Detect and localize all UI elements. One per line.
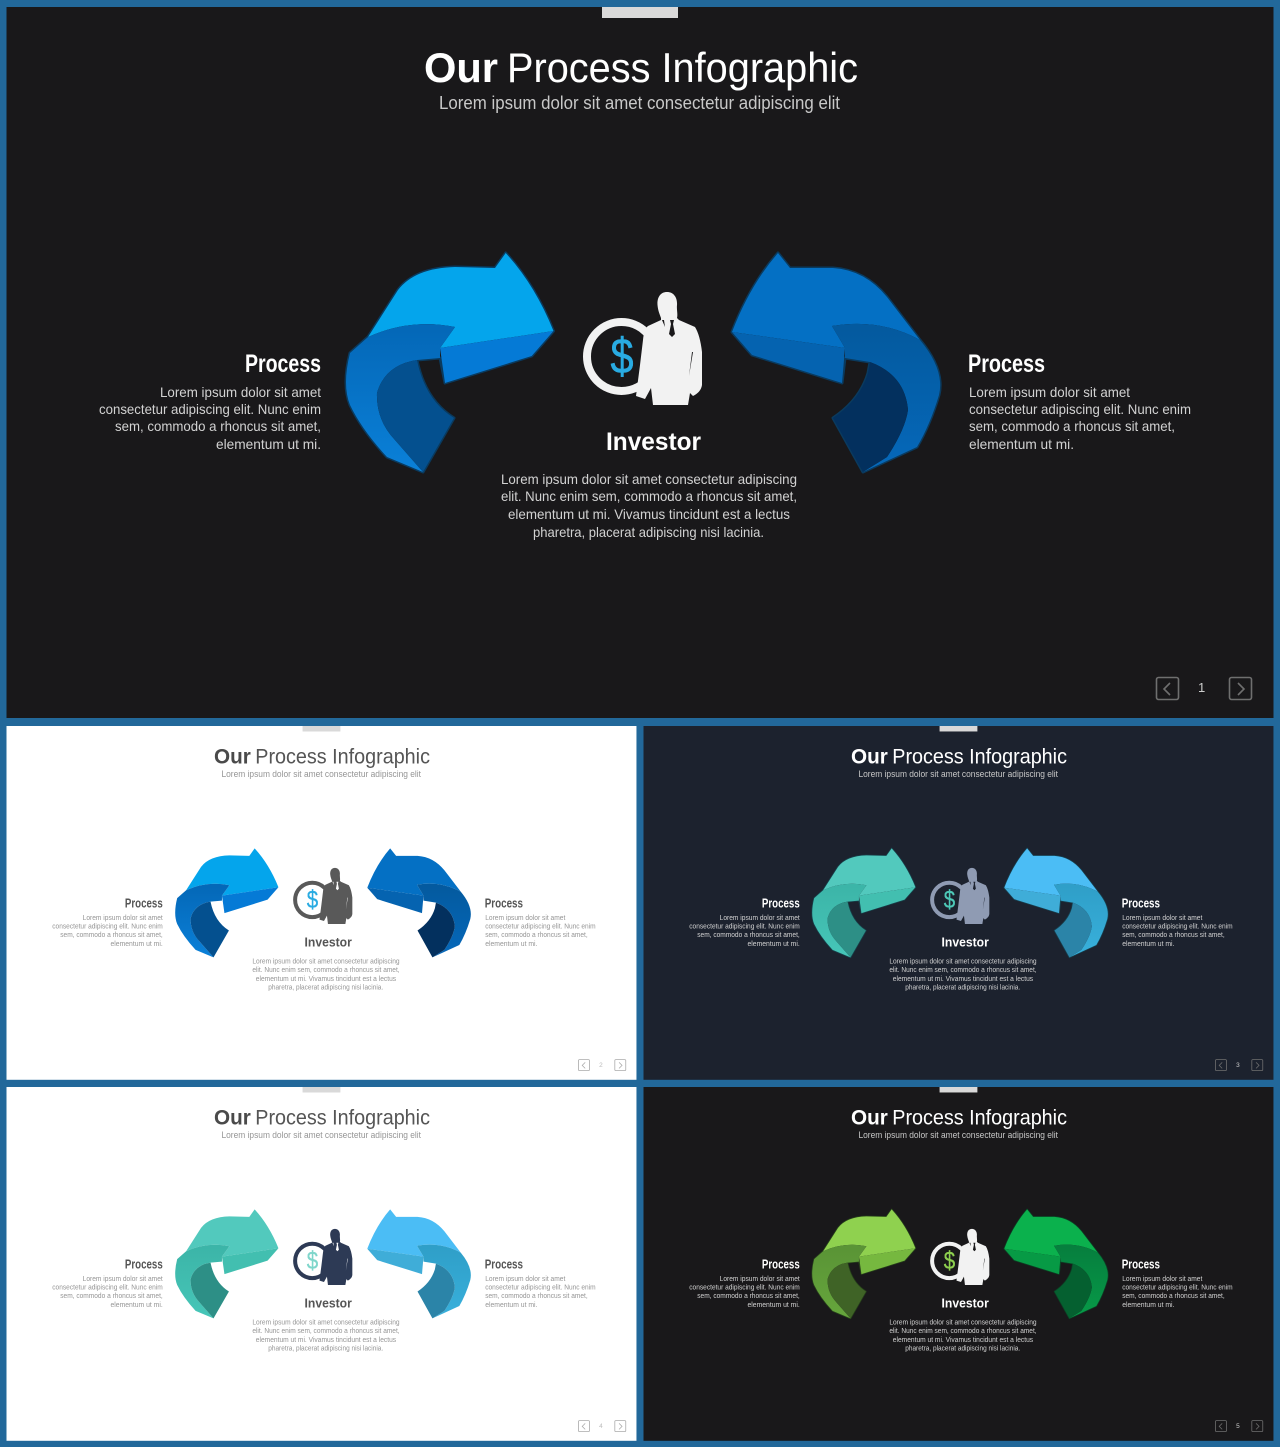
investor text: Lorem ipsum dolor sit amet consectetur adipiscing bbox=[252, 958, 400, 965]
right process heading: Process bbox=[485, 897, 523, 911]
left process text: Lorem ipsum dolor sit amet bbox=[720, 1276, 800, 1283]
title: Process Infographic bbox=[255, 745, 430, 768]
right process text: consectetur adipiscing elit. Nunc enim bbox=[1122, 924, 1233, 931]
right arrow bbox=[367, 1209, 471, 1318]
left process text: consectetur adipiscing elit. Nunc enim bbox=[99, 401, 321, 417]
right process text bbox=[1122, 915, 1233, 948]
left process text: elementum ut mi. bbox=[747, 1302, 800, 1309]
right process text: sem, commodo a rhoncus sit amet, bbox=[485, 932, 588, 939]
right process text: Lorem ipsum dolor sit amet bbox=[485, 1276, 565, 1283]
left process heading: Process bbox=[762, 1258, 800, 1272]
investor text: elit. Nunc enim sem, commodo a rhoncus sit amet, bbox=[889, 967, 1037, 974]
subtitle: Lorem ipsum dolor sit amet consectetur adipiscing elit bbox=[858, 1130, 1058, 1140]
investor text bbox=[889, 1319, 1037, 1353]
investor text: elementum ut mi. Vivamus tincidunt est a lectus bbox=[893, 976, 1034, 983]
left process text: consectetur adipiscing elit. Nunc enim bbox=[52, 924, 163, 931]
left process text: consectetur adipiscing elit. Nunc enim bbox=[689, 924, 800, 931]
right process text: Lorem ipsum dolor sit amet bbox=[1122, 915, 1202, 922]
left process heading: Process bbox=[762, 897, 800, 911]
left arrow bbox=[346, 253, 554, 472]
left arrow bbox=[175, 1209, 278, 1318]
right process text: sem, commodo a rhoncus sit amet, bbox=[1122, 932, 1225, 939]
left process heading: Process bbox=[125, 897, 163, 911]
title: Process Infographic bbox=[892, 1106, 1067, 1129]
navigation bbox=[578, 1421, 626, 1432]
navigation bbox=[1156, 678, 1252, 700]
icon: investor with dollar coin bbox=[295, 868, 352, 924]
left process text: sem, commodo a rhoncus sit amet, bbox=[60, 1293, 163, 1300]
investor text bbox=[252, 1319, 400, 1353]
investor text: Lorem ipsum dolor sit amet consectetur adipiscing bbox=[889, 1319, 1037, 1326]
investor text bbox=[889, 958, 1037, 992]
right process text: consectetur adipiscing elit. Nunc enim bbox=[485, 924, 596, 931]
left arrow bbox=[175, 848, 278, 957]
right process text bbox=[485, 1276, 596, 1309]
right process text: consectetur adipiscing elit. Nunc enim bbox=[1122, 1285, 1233, 1292]
right process text: Lorem ipsum dolor sit amet bbox=[485, 915, 565, 922]
left process text bbox=[52, 1276, 163, 1309]
title: Our bbox=[851, 1106, 888, 1129]
investor text: elit. Nunc enim sem, commodo a rhoncus sit amet, bbox=[252, 967, 400, 974]
right process text bbox=[969, 384, 1191, 452]
right process text: consectetur adipiscing elit. Nunc enim bbox=[485, 1285, 596, 1292]
icon: investor with dollar coin: $ bbox=[307, 1247, 318, 1275]
title: Process Infographic bbox=[892, 745, 1067, 768]
title: Our bbox=[214, 1106, 251, 1129]
investor text: elit. Nunc enim sem, commodo a rhoncus sit amet, bbox=[252, 1328, 400, 1335]
right arrow bbox=[732, 253, 940, 472]
icon: investor with dollar coin bbox=[932, 1229, 989, 1285]
left process text: sem, commodo a rhoncus sit amet, bbox=[60, 932, 163, 939]
investor text: pharetra, placerat adipiscing nisi lacinia. bbox=[268, 1346, 383, 1353]
left process text bbox=[99, 384, 321, 452]
left arrow bbox=[812, 1209, 915, 1318]
subtitle: Lorem ipsum dolor sit amet consectetur adipiscing elit bbox=[439, 93, 840, 113]
right process heading: Process bbox=[968, 350, 1045, 378]
investor text: pharetra, placerat adipiscing nisi lacinia. bbox=[268, 985, 383, 992]
right process text bbox=[485, 915, 596, 948]
subtitle: Lorem ipsum dolor sit amet consectetur adipiscing elit bbox=[221, 1130, 421, 1140]
icon: investor with dollar coin bbox=[932, 868, 989, 924]
title: Our bbox=[214, 745, 251, 768]
left process text: elementum ut mi. bbox=[110, 941, 163, 948]
right process heading: Process bbox=[1122, 1258, 1160, 1272]
right process text: consectetur adipiscing elit. Nunc enim bbox=[969, 401, 1191, 417]
right process text: Lorem ipsum dolor sit amet bbox=[969, 384, 1130, 400]
investor text: Lorem ipsum dolor sit amet consectetur adipiscing bbox=[252, 1319, 400, 1326]
investor text: Lorem ipsum dolor sit amet consectetur adipiscing bbox=[501, 471, 797, 487]
left process text: sem, commodo a rhoncus sit amet, bbox=[115, 418, 321, 434]
right process text: sem, commodo a rhoncus sit amet, bbox=[1122, 1293, 1225, 1300]
panel: white slide, blue arrows bbox=[6, 726, 636, 1080]
title: Process Infographic bbox=[507, 44, 858, 91]
right process text: elementum ut mi. bbox=[485, 1302, 538, 1309]
investor text: elit. Nunc enim sem, commodo a rhoncus sit amet, bbox=[889, 1328, 1037, 1335]
right process text: elementum ut mi. bbox=[1122, 941, 1175, 948]
panel: navy slide, teal arrows bbox=[644, 726, 1273, 1080]
navigation: 5 bbox=[1236, 1423, 1240, 1430]
icon: investor with dollar coin: $ bbox=[307, 886, 318, 914]
icon: investor with dollar coin bbox=[295, 1229, 352, 1285]
right process heading: Process bbox=[1122, 897, 1160, 911]
left process text: elementum ut mi. bbox=[110, 1302, 163, 1309]
left process text: Lorem ipsum dolor sit amet bbox=[83, 915, 163, 922]
investor heading: Investor bbox=[305, 1296, 352, 1310]
right process text: sem, commodo a rhoncus sit amet, bbox=[485, 1293, 588, 1300]
navigation: 4 bbox=[599, 1423, 603, 1430]
right process text bbox=[1122, 1276, 1233, 1309]
investor heading: Investor bbox=[305, 935, 352, 949]
panel: white slide, teal arrows bbox=[6, 1087, 636, 1441]
icon: investor with dollar coin: $ bbox=[944, 1247, 955, 1275]
right arrow bbox=[1004, 848, 1108, 957]
right process text: elementum ut mi. bbox=[485, 941, 538, 948]
navigation bbox=[1215, 1060, 1263, 1071]
left process text: sem, commodo a rhoncus sit amet, bbox=[697, 932, 800, 939]
subtitle: Lorem ipsum dolor sit amet consectetur adipiscing elit bbox=[221, 769, 421, 779]
title: Our bbox=[851, 745, 888, 768]
investor text: elit. Nunc enim sem, commodo a rhoncus sit amet, bbox=[501, 488, 797, 504]
left process text: elementum ut mi. bbox=[216, 436, 321, 452]
left process heading: Process bbox=[125, 1258, 163, 1272]
right process text: sem, commodo a rhoncus sit amet, bbox=[969, 418, 1175, 434]
title: Process Infographic bbox=[255, 1106, 430, 1129]
right process text: Lorem ipsum dolor sit amet bbox=[1122, 1276, 1202, 1283]
left arrow bbox=[812, 848, 915, 957]
investor text bbox=[501, 471, 797, 540]
investor text: elementum ut mi. Vivamus tincidunt est a lectus bbox=[893, 1337, 1034, 1344]
navigation: 2 bbox=[599, 1062, 603, 1069]
icon: investor with dollar coin: $ bbox=[944, 886, 955, 914]
investor text: elementum ut mi. Vivamus tincidunt est a lectus bbox=[256, 1337, 397, 1344]
left process heading: Process bbox=[245, 350, 321, 378]
navigation: 1 bbox=[1198, 680, 1205, 695]
investor text bbox=[252, 958, 400, 992]
navigation bbox=[578, 1060, 626, 1071]
left process text: Lorem ipsum dolor sit amet bbox=[720, 915, 800, 922]
left process text: consectetur adipiscing elit. Nunc enim bbox=[689, 1285, 800, 1292]
right arrow bbox=[367, 848, 471, 957]
left process text bbox=[52, 915, 163, 948]
left process text: sem, commodo a rhoncus sit amet, bbox=[697, 1293, 800, 1300]
navigation bbox=[1215, 1421, 1263, 1432]
icon: investor with dollar coin bbox=[587, 292, 702, 405]
left process text: consectetur adipiscing elit. Nunc enim bbox=[52, 1285, 163, 1292]
icon: investor with dollar coin: $ bbox=[610, 328, 634, 384]
subtitle: Lorem ipsum dolor sit amet consectetur adipiscing elit bbox=[858, 769, 1058, 779]
title: Our bbox=[424, 44, 498, 91]
left process text: Lorem ipsum dolor sit amet bbox=[83, 1276, 163, 1283]
investor text: pharetra, placerat adipiscing nisi lacinia. bbox=[905, 985, 1020, 992]
investor heading: Investor bbox=[606, 428, 701, 456]
right process text: elementum ut mi. bbox=[1122, 1302, 1175, 1309]
left process text: elementum ut mi. bbox=[747, 941, 800, 948]
investor text: pharetra, placerat adipiscing nisi lacinia. bbox=[533, 524, 764, 540]
left process text: Lorem ipsum dolor sit amet bbox=[160, 384, 321, 400]
investor text: pharetra, placerat adipiscing nisi lacinia. bbox=[905, 1346, 1020, 1353]
investor heading: Investor bbox=[942, 935, 989, 949]
right arrow bbox=[1004, 1209, 1108, 1318]
navigation: 3 bbox=[1236, 1062, 1240, 1069]
left process text bbox=[689, 1276, 800, 1309]
panel: large dark slide bbox=[6, 7, 1274, 718]
right process heading: Process bbox=[485, 1258, 523, 1272]
investor text: Lorem ipsum dolor sit amet consectetur adipiscing bbox=[889, 958, 1037, 965]
right process text: elementum ut mi. bbox=[969, 436, 1074, 452]
panel: dark slide, green arrows bbox=[644, 1087, 1273, 1441]
investor heading: Investor bbox=[942, 1296, 989, 1310]
investor text: elementum ut mi. Vivamus tincidunt est a lectus bbox=[256, 976, 397, 983]
left process text bbox=[689, 915, 800, 948]
investor text: elementum ut mi. Vivamus tincidunt est a lectus bbox=[508, 506, 790, 522]
